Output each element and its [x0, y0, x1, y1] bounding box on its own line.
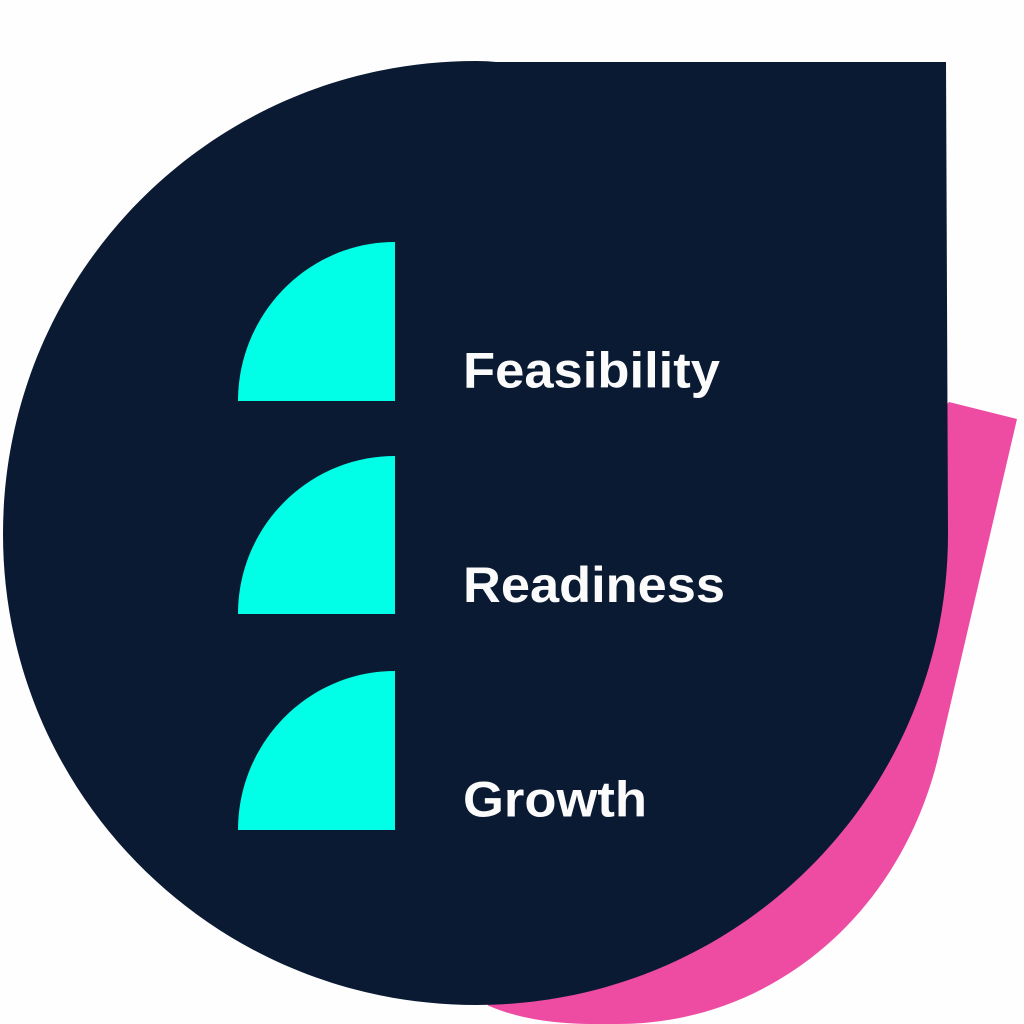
label: Feasibility: Feasibility	[463, 342, 720, 398]
item: Growth	[238, 671, 647, 830]
item: Feasibility	[238, 242, 720, 401]
item: Readiness	[238, 456, 725, 614]
label: Growth: Growth	[463, 772, 647, 828]
label: Readiness: Readiness	[463, 557, 725, 613]
icon: cyan quarter circle 3	[238, 671, 395, 830]
icon: cyan quarter circle 2	[238, 456, 395, 614]
pink background shape	[480, 402, 1017, 1024]
icon: cyan quarter circle 1	[238, 242, 395, 401]
